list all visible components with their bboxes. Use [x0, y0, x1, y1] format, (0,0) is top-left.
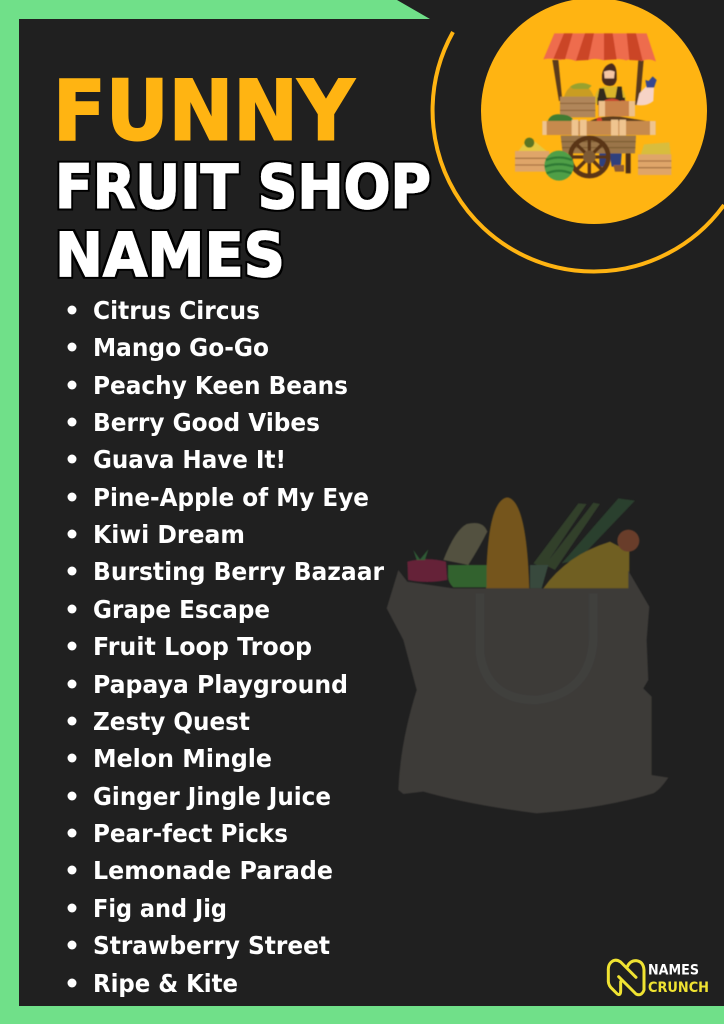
logo: Names Crunch: [608, 960, 709, 996]
tomatoes: [600, 99, 632, 104]
poles: [552, 60, 644, 105]
list of fruit shop names: Ginger Jingle Juice: [93, 782, 331, 811]
main crate row: [542, 121, 656, 135]
green apple: [448, 565, 487, 587]
list of fruit shop names: Berry Good Vibes: [93, 408, 320, 437]
list of fruit shop names: Zesty Quest: [93, 707, 250, 736]
wheel: [570, 138, 608, 176]
cart body: [561, 136, 636, 153]
baguette: [443, 523, 487, 565]
right crate produce: [641, 142, 671, 155]
list of fruit shop names: Fig and Jig: [93, 894, 227, 923]
wordmark: CRUNCH: CRUNCH: [648, 980, 709, 996]
title line: FRUIT SHOP NAMES: [55, 152, 431, 291]
list of fruit shop names: Peachy Keen Beans: [93, 371, 348, 400]
crate two: [598, 101, 635, 116]
decorative ring arc: [433, 32, 724, 272]
title line: FRUIT SHOP NAMES: FRUIT SHOP: [55, 152, 431, 223]
wordmark: NAMES: NAMES: [648, 962, 699, 978]
right crate: [638, 154, 671, 175]
list of fruit shop names: Bursting Berry Bazaar: [93, 557, 385, 586]
list of fruit shop names: Guava Have It!: [93, 445, 286, 474]
yellow fruit: [543, 542, 629, 588]
icon: watermelon: [544, 151, 574, 181]
shirt and apron: [593, 87, 627, 103]
list of fruit shop names: Kiwi Dream: [93, 520, 245, 549]
list of fruit shop names: Citrus Circus: [93, 296, 260, 325]
arm and hand: [637, 87, 654, 105]
list of fruit shop names: Grape Escape: [93, 595, 270, 624]
title line: FUNNY: FUNNY: [53, 62, 355, 160]
leek greens: [533, 503, 600, 570]
crate one: [560, 97, 595, 117]
vendor head: [602, 63, 617, 86]
bag body: [387, 570, 668, 813]
orange loaf: [486, 497, 529, 588]
bananas: [564, 84, 594, 97]
logo mark: [608, 960, 644, 995]
list of fruit shop names: Pine-Apple of My Eye: [93, 483, 369, 512]
red apple: [407, 559, 447, 582]
list of fruit shop names: Ripe & Kite: [93, 969, 238, 998]
awning: [543, 33, 656, 62]
list of fruit shop names: Pear-fect Picks: [93, 819, 288, 848]
list of fruit shop names: Strawberry Street: [93, 931, 330, 960]
list of fruit shop names: Melon Mingle: [93, 744, 272, 773]
list of fruit shop names: Mango Go-Go: [93, 333, 269, 362]
list of fruit shop names: Papaya Playground: [93, 670, 348, 699]
icon: faded grocery bag: [387, 497, 668, 813]
icon: fruit stall in yellow circle: [481, 0, 707, 224]
legs: [599, 153, 622, 167]
bag handle: [480, 593, 593, 700]
list of fruit shop names: [68, 296, 385, 998]
list of fruit shop names: Lemonade Parade: [93, 856, 333, 885]
title: [53, 62, 431, 291]
list of fruit shop names: Fruit Loop Troop: [93, 632, 312, 661]
left crate: [515, 151, 549, 172]
greens: [548, 114, 574, 122]
bullets: [68, 306, 76, 988]
left crate produce: [518, 142, 547, 152]
title line: FRUIT SHOP NAMES: NAMES: [55, 220, 285, 291]
